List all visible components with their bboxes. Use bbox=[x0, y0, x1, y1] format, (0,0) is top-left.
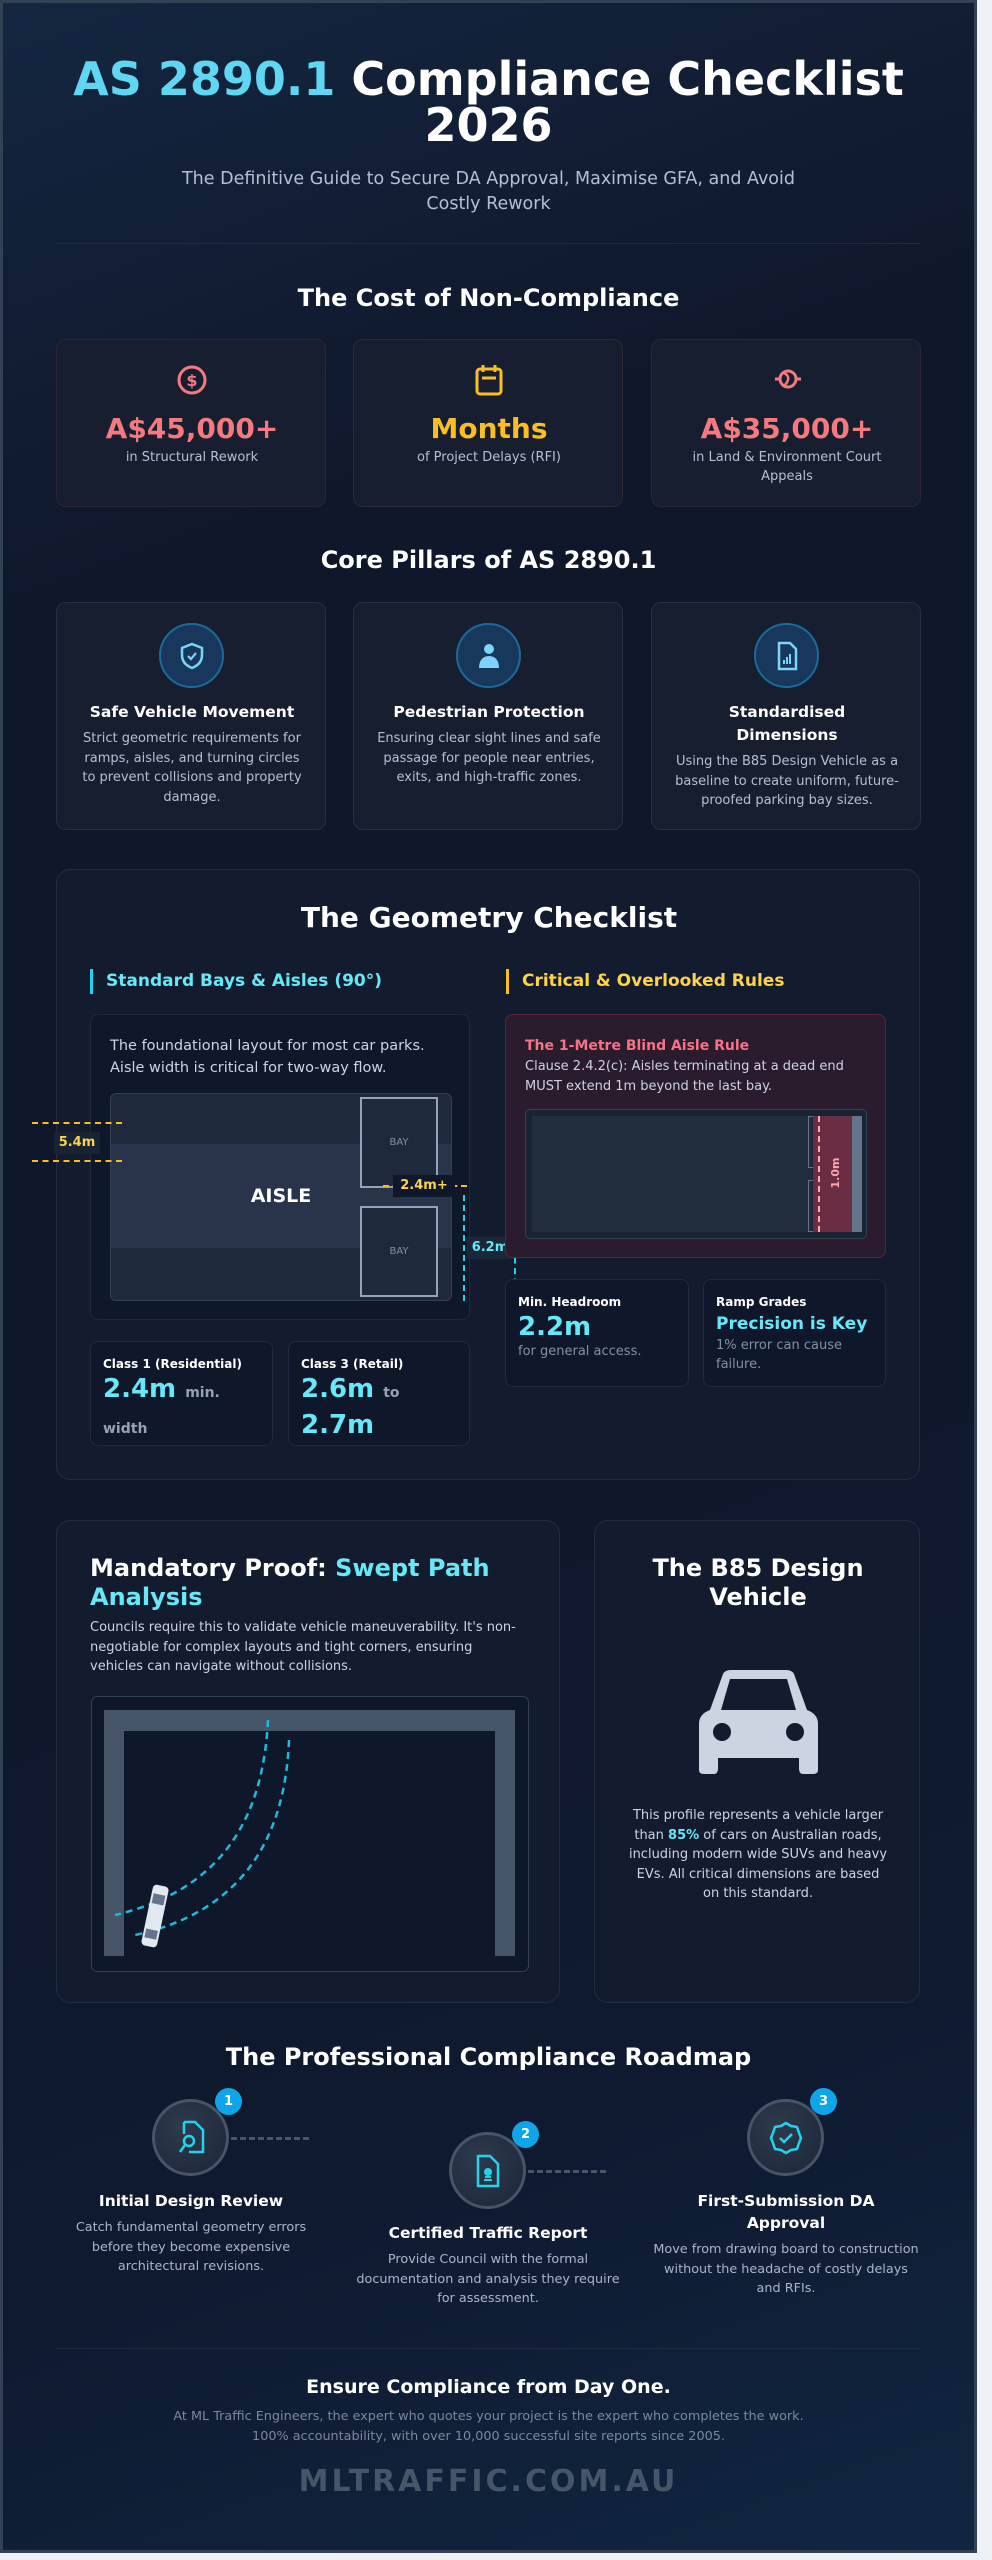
headroom box: 2.2m bbox=[518, 1312, 591, 1342]
icon: shield bbox=[159, 623, 224, 688]
desc bbox=[90, 1620, 516, 1674]
desc: Catch fundamental geometry errors bbox=[76, 2220, 306, 2235]
icon: gavel swirl bbox=[775, 370, 801, 388]
dimension: 2.4m+: 2.4m+ bbox=[400, 1178, 448, 1193]
callout: blind aisle rule: Clause 2.4.2(c): Aisles terminating at a dead end bbox=[525, 1059, 844, 1074]
icon: dollar: $ bbox=[186, 371, 198, 390]
desc: including modern wide SUVs and heavy bbox=[629, 1847, 887, 1862]
heading: core pillars: Core Pillars of AS 2890.1 bbox=[321, 546, 656, 574]
icon: search doc bbox=[152, 2099, 229, 2176]
pillar 1 bbox=[56, 602, 326, 830]
ramp grades box: Precision is Key bbox=[716, 1314, 867, 1334]
subheading: critical rules: Critical & Overlooked Rules bbox=[522, 971, 784, 991]
desc: vehicles can navigate without collisions. bbox=[90, 1659, 352, 1674]
pillar 2 bbox=[353, 602, 623, 830]
connector bbox=[231, 2137, 309, 2140]
icon: dollar bbox=[178, 366, 206, 394]
title bbox=[73, 52, 904, 152]
heading: The Geometry Checklist bbox=[301, 901, 677, 934]
cost card 2 bbox=[353, 339, 623, 507]
subheading: standard bays: Standard Bays & Aisles (90°) bbox=[106, 971, 382, 991]
aisle label: AISLE bbox=[251, 1185, 311, 1207]
desc: Move from drawing board to construction bbox=[653, 2242, 919, 2257]
callout: blind aisle rule: MUST extend 1m beyond the last bay. bbox=[525, 1079, 772, 1094]
heading bbox=[90, 1554, 490, 1611]
heading: Mandatory Proof: Swept Path bbox=[90, 1554, 490, 1582]
title: 2026 bbox=[424, 98, 553, 152]
badge: 1 bbox=[224, 2094, 233, 2109]
diagram: blind aisle: 1.0m bbox=[829, 1158, 842, 1188]
desc bbox=[653, 2242, 919, 2296]
subtitle bbox=[182, 169, 795, 214]
headroom box: Min. Headroom bbox=[518, 1295, 621, 1309]
desc: EVs. All critical dimensions are based bbox=[637, 1866, 879, 1882]
footer brand: MLTRAFFIC.COM.AU bbox=[299, 2464, 678, 2499]
ramp grades box bbox=[703, 1279, 886, 1387]
bay 2: BAY bbox=[389, 1246, 409, 1257]
desc: for assessment. bbox=[437, 2291, 539, 2306]
bay 1: BAY bbox=[389, 1137, 409, 1148]
icon: calendar bbox=[476, 365, 502, 396]
step 3 bbox=[653, 2088, 919, 2296]
title: Approval bbox=[747, 2214, 825, 2232]
roadmap steps bbox=[76, 2088, 919, 2306]
badge: 3 bbox=[819, 2094, 828, 2109]
title: Standardised Dimensions bbox=[729, 703, 845, 744]
badge: 2 bbox=[521, 2127, 530, 2142]
desc bbox=[629, 1808, 887, 1901]
icon: badge check bbox=[747, 2099, 824, 2176]
badge bbox=[810, 2088, 837, 2115]
class 3 box: 2.7m bbox=[301, 1410, 374, 1440]
headroom box bbox=[505, 1279, 689, 1387]
bay 1 bbox=[360, 1097, 438, 1188]
bay 2 bbox=[360, 1206, 438, 1297]
title bbox=[697, 2192, 875, 2232]
heading: cost of non-compliance: The Cost of Non-Compliance bbox=[298, 284, 679, 312]
class 1 box: width bbox=[103, 1421, 147, 1437]
desc: than 85% of cars on Australian roads, bbox=[634, 1828, 882, 1842]
value: A$35,000+ bbox=[701, 412, 873, 445]
desc: Ensuring clear sight lines and safe passage for people near entries, exits, and high-traffic zones. bbox=[377, 731, 601, 785]
desc: negotiable for complex layouts and tight corners, ensuring bbox=[90, 1640, 472, 1654]
desc: documentation and analysis they require bbox=[356, 2272, 620, 2286]
panel: swept path bbox=[56, 1520, 560, 2003]
title: AS 2890.1 Compliance Checklist bbox=[73, 52, 904, 106]
connector bbox=[528, 2170, 606, 2173]
label: in Structural Rework bbox=[126, 450, 258, 465]
class 3 box bbox=[288, 1341, 470, 1446]
badge bbox=[512, 2121, 539, 2148]
panel: B85 design vehicle bbox=[594, 1520, 920, 2003]
label: of Project Delays (RFI) bbox=[417, 450, 561, 465]
text: The foundational layout for most car parks. bbox=[110, 1038, 425, 1054]
value: A$45,000+ bbox=[106, 412, 278, 445]
text: Aisle width is critical for two-way flow. bbox=[110, 1060, 387, 1076]
desc: Provide Council with the formal bbox=[388, 2252, 588, 2267]
title: Safe Vehicle Movement bbox=[90, 703, 294, 721]
desc bbox=[76, 2220, 306, 2274]
desc: Strict geometric requirements for ramps, aisles, and turning circles to prevent collisions and property damage. bbox=[82, 731, 302, 804]
heading bbox=[652, 1554, 864, 1611]
title: Certified Traffic Report bbox=[389, 2224, 587, 2242]
panel: cost cards bbox=[56, 339, 921, 507]
desc: Councils require this to validate vehicle maneuverability. It's non- bbox=[90, 1620, 516, 1635]
dimension: 6.2m: 6.2m bbox=[472, 1240, 508, 1255]
desc: Using the B85 Design Vehicle as a baseline to create uniform, future-proofed parking bay sizes. bbox=[675, 754, 899, 808]
ramp grades box: failure. bbox=[716, 1357, 761, 1372]
desc: This profile represents a vehicle larger bbox=[633, 1808, 883, 1823]
footer heading: Ensure Compliance from Day One. bbox=[306, 2376, 671, 2398]
diagram: aisle bbox=[110, 1093, 452, 1301]
chart: swept path diagram bbox=[91, 1696, 529, 1972]
desc: before they become expensive bbox=[92, 2240, 290, 2254]
heading: Analysis bbox=[90, 1583, 203, 1611]
panel: bays diagram box bbox=[90, 1014, 470, 1320]
desc: without the headache of costly delays bbox=[664, 2262, 908, 2276]
icon: certified doc bbox=[449, 2132, 526, 2209]
step 2 bbox=[356, 2121, 620, 2306]
desc: and RFIs. bbox=[757, 2281, 815, 2296]
pillar 3 bbox=[651, 602, 921, 830]
class 3 box: Class 3 (Retail) bbox=[301, 1357, 403, 1371]
dimension: 5.4m: 5.4m bbox=[59, 1135, 95, 1150]
class 3 box: 2.6m to bbox=[301, 1374, 400, 1404]
label: in Land & Environment Court Appeals bbox=[693, 450, 881, 484]
callout: blind aisle rule: The 1-Metre Blind Aisle Rule bbox=[525, 1038, 749, 1054]
class 1 box: Class 1 (Residential) bbox=[103, 1357, 242, 1371]
heading: Vehicle bbox=[709, 1583, 807, 1611]
footer text: At ML Traffic Engineers, the expert who quotes your project is the expert who completes the work. bbox=[173, 2409, 804, 2424]
class 1 box: 2.4m min. bbox=[103, 1374, 220, 1404]
heading: roadmap: The Professional Compliance Roadmap bbox=[226, 2043, 751, 2071]
subtitle: The Definitive Guide to Secure DA Approval, Maximise GFA, and Avoid bbox=[182, 169, 795, 189]
step 1 bbox=[76, 2088, 309, 2274]
desc: architectural revisions. bbox=[118, 2259, 264, 2274]
title: Initial Design Review bbox=[99, 2192, 283, 2210]
footer text: 100% accountability, with over 10,000 successful site reports since 2005. bbox=[252, 2429, 725, 2444]
panel: pillars bbox=[56, 602, 921, 830]
cost card 3 bbox=[651, 339, 921, 507]
footer text bbox=[173, 2409, 804, 2444]
desc: on this standard. bbox=[703, 1886, 813, 1901]
icon: person bbox=[456, 623, 521, 688]
value: Months bbox=[430, 412, 548, 445]
title: First-Submission DA bbox=[697, 2192, 875, 2210]
icon: document chart bbox=[754, 623, 819, 688]
subtitle: Costly Rework bbox=[426, 194, 551, 214]
callout: blind aisle rule bbox=[505, 1014, 886, 1258]
title: Pedestrian Protection bbox=[393, 703, 585, 721]
badge bbox=[215, 2088, 242, 2115]
headroom box: for general access. bbox=[518, 1344, 642, 1359]
panel: geometry checklist bbox=[56, 869, 920, 1480]
diagram: blind aisle bbox=[525, 1109, 867, 1239]
heading: The B85 Design bbox=[652, 1554, 864, 1582]
text bbox=[110, 1038, 425, 1076]
icon: car bbox=[699, 1670, 818, 1774]
ramp grades box: Ramp Grades bbox=[716, 1295, 806, 1309]
desc bbox=[356, 2252, 620, 2306]
cost card 1 bbox=[56, 339, 326, 507]
ramp grades box: 1% error can cause bbox=[716, 1338, 842, 1353]
class 1 box bbox=[90, 1341, 273, 1446]
